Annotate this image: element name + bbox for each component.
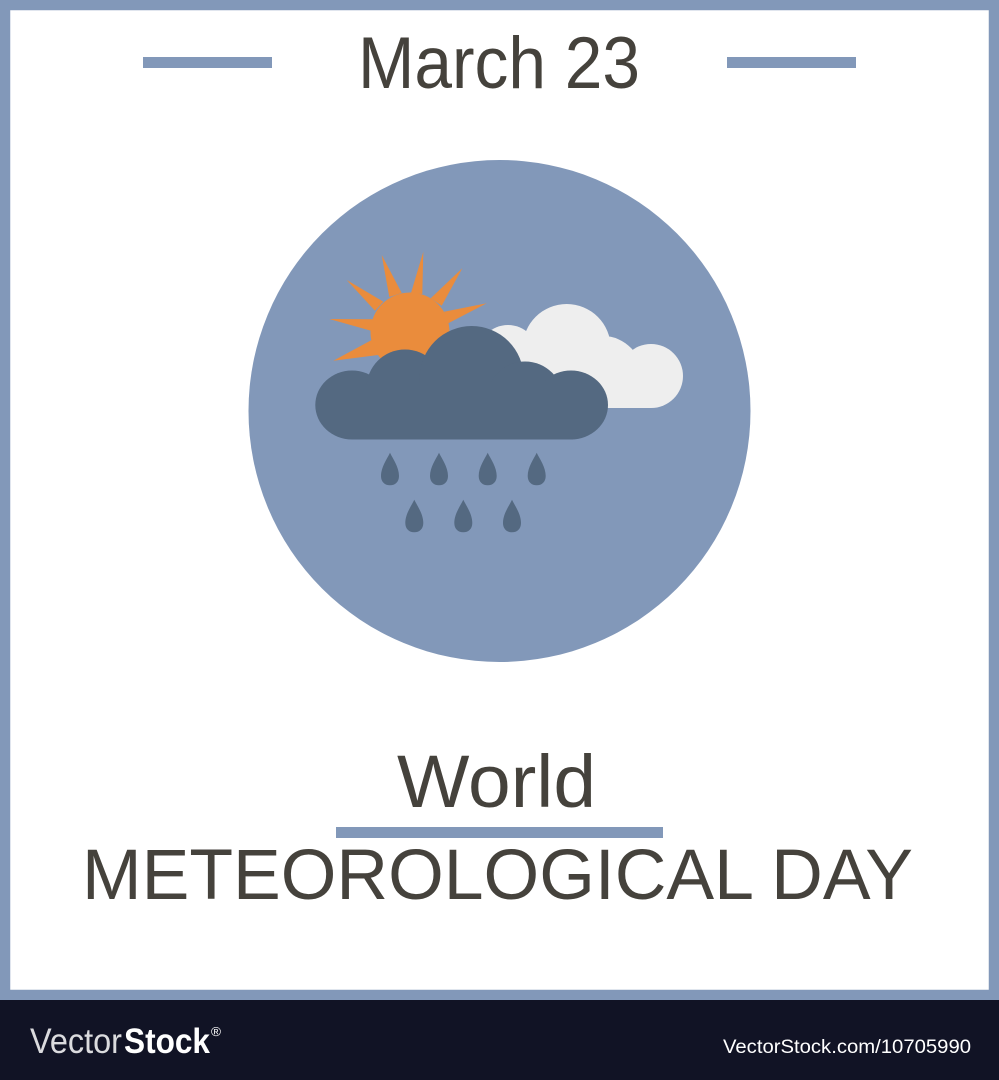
footer bar [0, 1000, 999, 1080]
title: World Meteorological Day [82, 740, 913, 915]
icon: dark rain cloud [315, 326, 608, 440]
footer image id: VectorStock.com/10705990 [723, 1037, 971, 1058]
title: World Meteorological Day: METEOROLOGICAL DAY [82, 836, 913, 915]
footer logo: VectorStock: ® [211, 1024, 221, 1039]
footer logo: VectorStock: Stock [124, 1022, 210, 1061]
footer logo: VectorStock: Vector [30, 1022, 122, 1061]
footer logo: VectorStock [30, 1022, 221, 1061]
title: World Meteorological Day: World [397, 740, 596, 823]
icon: rain drops [381, 453, 546, 532]
icon: white cloud [492, 304, 683, 408]
icon: sun [329, 252, 487, 372]
main circle badge [248, 160, 750, 662]
date heading: March 23 [143, 21, 856, 104]
date heading: March 23: March 23 [358, 21, 640, 104]
